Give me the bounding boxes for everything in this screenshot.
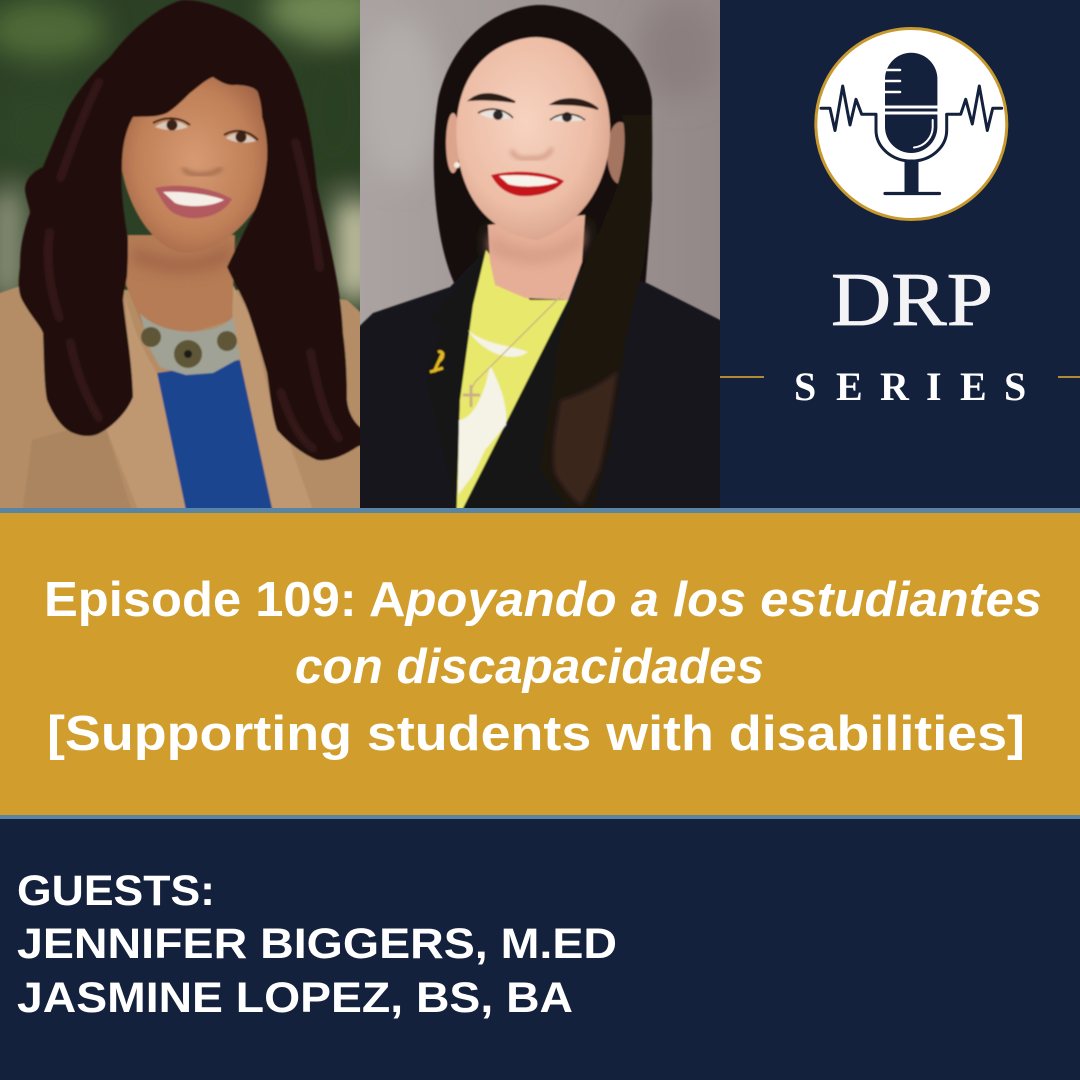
hair highlights: [48, 80, 340, 450]
face: [456, 37, 610, 240]
blue top: [156, 359, 273, 508]
DRP wordmark: DRP: [831, 258, 993, 342]
smile: [155, 186, 232, 218]
portrait figure: [360, 4, 720, 508]
gold band: [0, 513, 1080, 815]
backdrop shading: [367, 8, 708, 174]
right eyebrow: [552, 99, 598, 109]
necklace: [140, 313, 240, 375]
left lapel: [107, 305, 186, 508]
badge circle: [816, 28, 1007, 220]
right lapel: [540, 303, 571, 508]
hair mass: [19, 0, 375, 460]
mic capsule: [885, 53, 937, 153]
episode title line 1: Episode 109: Apoyando a los estudiantes: [44, 573, 1042, 627]
tan blazer: [0, 286, 360, 508]
long hair over shoulder: [540, 115, 652, 530]
right ear: [606, 120, 626, 184]
guest name: Jasmine Lopez: JASMINE LOPEZ, BS, BA: [17, 974, 573, 1022]
left eyebrow: [470, 94, 515, 102]
rule left of SERIES: [720, 376, 764, 378]
right eye: [224, 131, 258, 143]
red smile: [491, 172, 564, 196]
yellow shirt: [452, 250, 568, 530]
face: [121, 70, 268, 253]
guests block: [17, 867, 617, 1022]
neck shadow: [490, 225, 585, 263]
band bottom edge: [0, 815, 1080, 819]
white shirt pattern: [458, 330, 528, 495]
black jacket: [360, 254, 720, 508]
mic stem: [904, 161, 918, 192]
blazer front shading: [24, 428, 130, 508]
right sound wave: [947, 86, 1002, 130]
photo background: blurred foliage: [0, 0, 360, 312]
earring: [454, 162, 460, 168]
guest name: Jennifer Biggers: JENNIFER BIGGERS, M.ED: [17, 920, 617, 968]
left eye: [153, 118, 190, 130]
mic holder: [876, 114, 947, 161]
nose shadow: [512, 148, 552, 159]
necklace chain and cross: [463, 292, 565, 407]
SERIES wordmark: SERIES: [794, 364, 1026, 409]
guests heading: GUESTS:: [17, 867, 215, 915]
right eye: [550, 112, 585, 122]
hair top front: [438, 4, 609, 104]
hair lower brown tone: [553, 370, 618, 506]
logo badge: [816, 28, 1007, 220]
photo: Jennifer Biggers: [0, 0, 360, 508]
photo: Jasmine Lopez: [360, 0, 720, 508]
left sound wave: [821, 86, 876, 130]
episode title band: [0, 508, 1080, 819]
episode title line 2: con discapacidades: [295, 640, 764, 694]
left eye: [478, 109, 513, 120]
yellow ribbon pin: [430, 352, 443, 372]
portrait figure: [0, 0, 380, 530]
neck and chest: [126, 235, 235, 345]
neck: [488, 215, 585, 300]
neck shadow: [130, 240, 232, 274]
left ear: [446, 113, 460, 173]
microphone icon: [821, 53, 1002, 194]
episode title line 3: [Supporting students with disabilities]: [47, 707, 1025, 761]
rule right of SERIES: [1058, 376, 1080, 378]
band top edge: [0, 508, 1080, 513]
mic base: [885, 192, 940, 195]
nose shadow: [183, 168, 222, 175]
grey studio backdrop: [360, 0, 720, 327]
right lapel: [232, 285, 312, 508]
hair back: [434, 5, 652, 290]
left lapel: [457, 255, 480, 428]
mic highlights: [884, 70, 938, 148]
